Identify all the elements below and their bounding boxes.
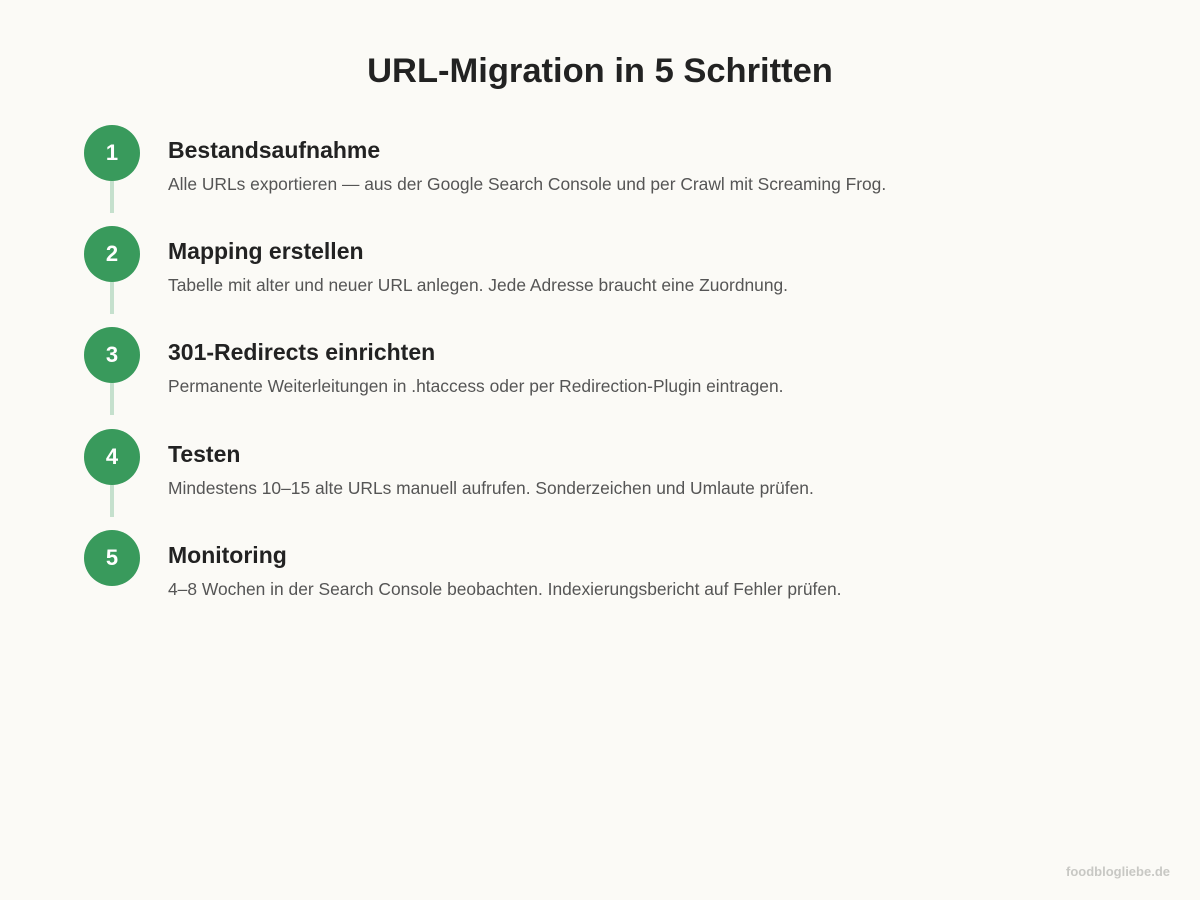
- heading 5: Monitoring: [168, 542, 287, 568]
- step 1: [84, 125, 886, 213]
- heading 3: 301-Redirects einrichten: [168, 339, 435, 365]
- icon: number 2: [84, 226, 140, 282]
- step 5: [84, 530, 842, 599]
- icon: number 3: 3: [106, 342, 118, 367]
- icon: number 5: 5: [106, 545, 118, 570]
- text 4: Mindestens 10–15 alte URLs manuell aufrufen. Sonderzeichen und Umlaute prüfen.: [168, 478, 814, 498]
- icon: number 4: 4: [106, 444, 118, 469]
- icon: number 1: [84, 125, 140, 181]
- footer credit: foodblogliebe.de: [1066, 864, 1170, 879]
- step 4: [84, 429, 814, 517]
- title: URL-Migration in 5 Schritten: [367, 52, 833, 90]
- text 5: 4–8 Wochen in der Search Console beobachten. Indexierungsbericht auf Fehler prüfen.: [168, 579, 842, 599]
- heading 1: Bestandsaufnahme: [168, 137, 380, 163]
- heading 4: Testen: [168, 441, 240, 467]
- step 3: [84, 327, 783, 415]
- icon: number 1: 1: [106, 140, 118, 165]
- step 2: [84, 226, 788, 314]
- text 1: Alle URLs exportieren — aus der Google Search Console und per Crawl mit Screaming Frog.: [168, 174, 886, 194]
- heading 2: Mapping erstellen: [168, 238, 364, 264]
- text 2: Tabelle mit alter und neuer URL anlegen. Jede Adresse braucht eine Zuordnung.: [168, 275, 788, 295]
- icon: number 4: [84, 429, 140, 485]
- icon: number 5: [84, 530, 140, 586]
- icon: number 3: [84, 327, 140, 383]
- text 3: Permanente Weiterleitungen in .htaccess oder per Redirection-Plugin eintragen.: [168, 376, 783, 396]
- icon: number 2: 2: [106, 241, 118, 266]
